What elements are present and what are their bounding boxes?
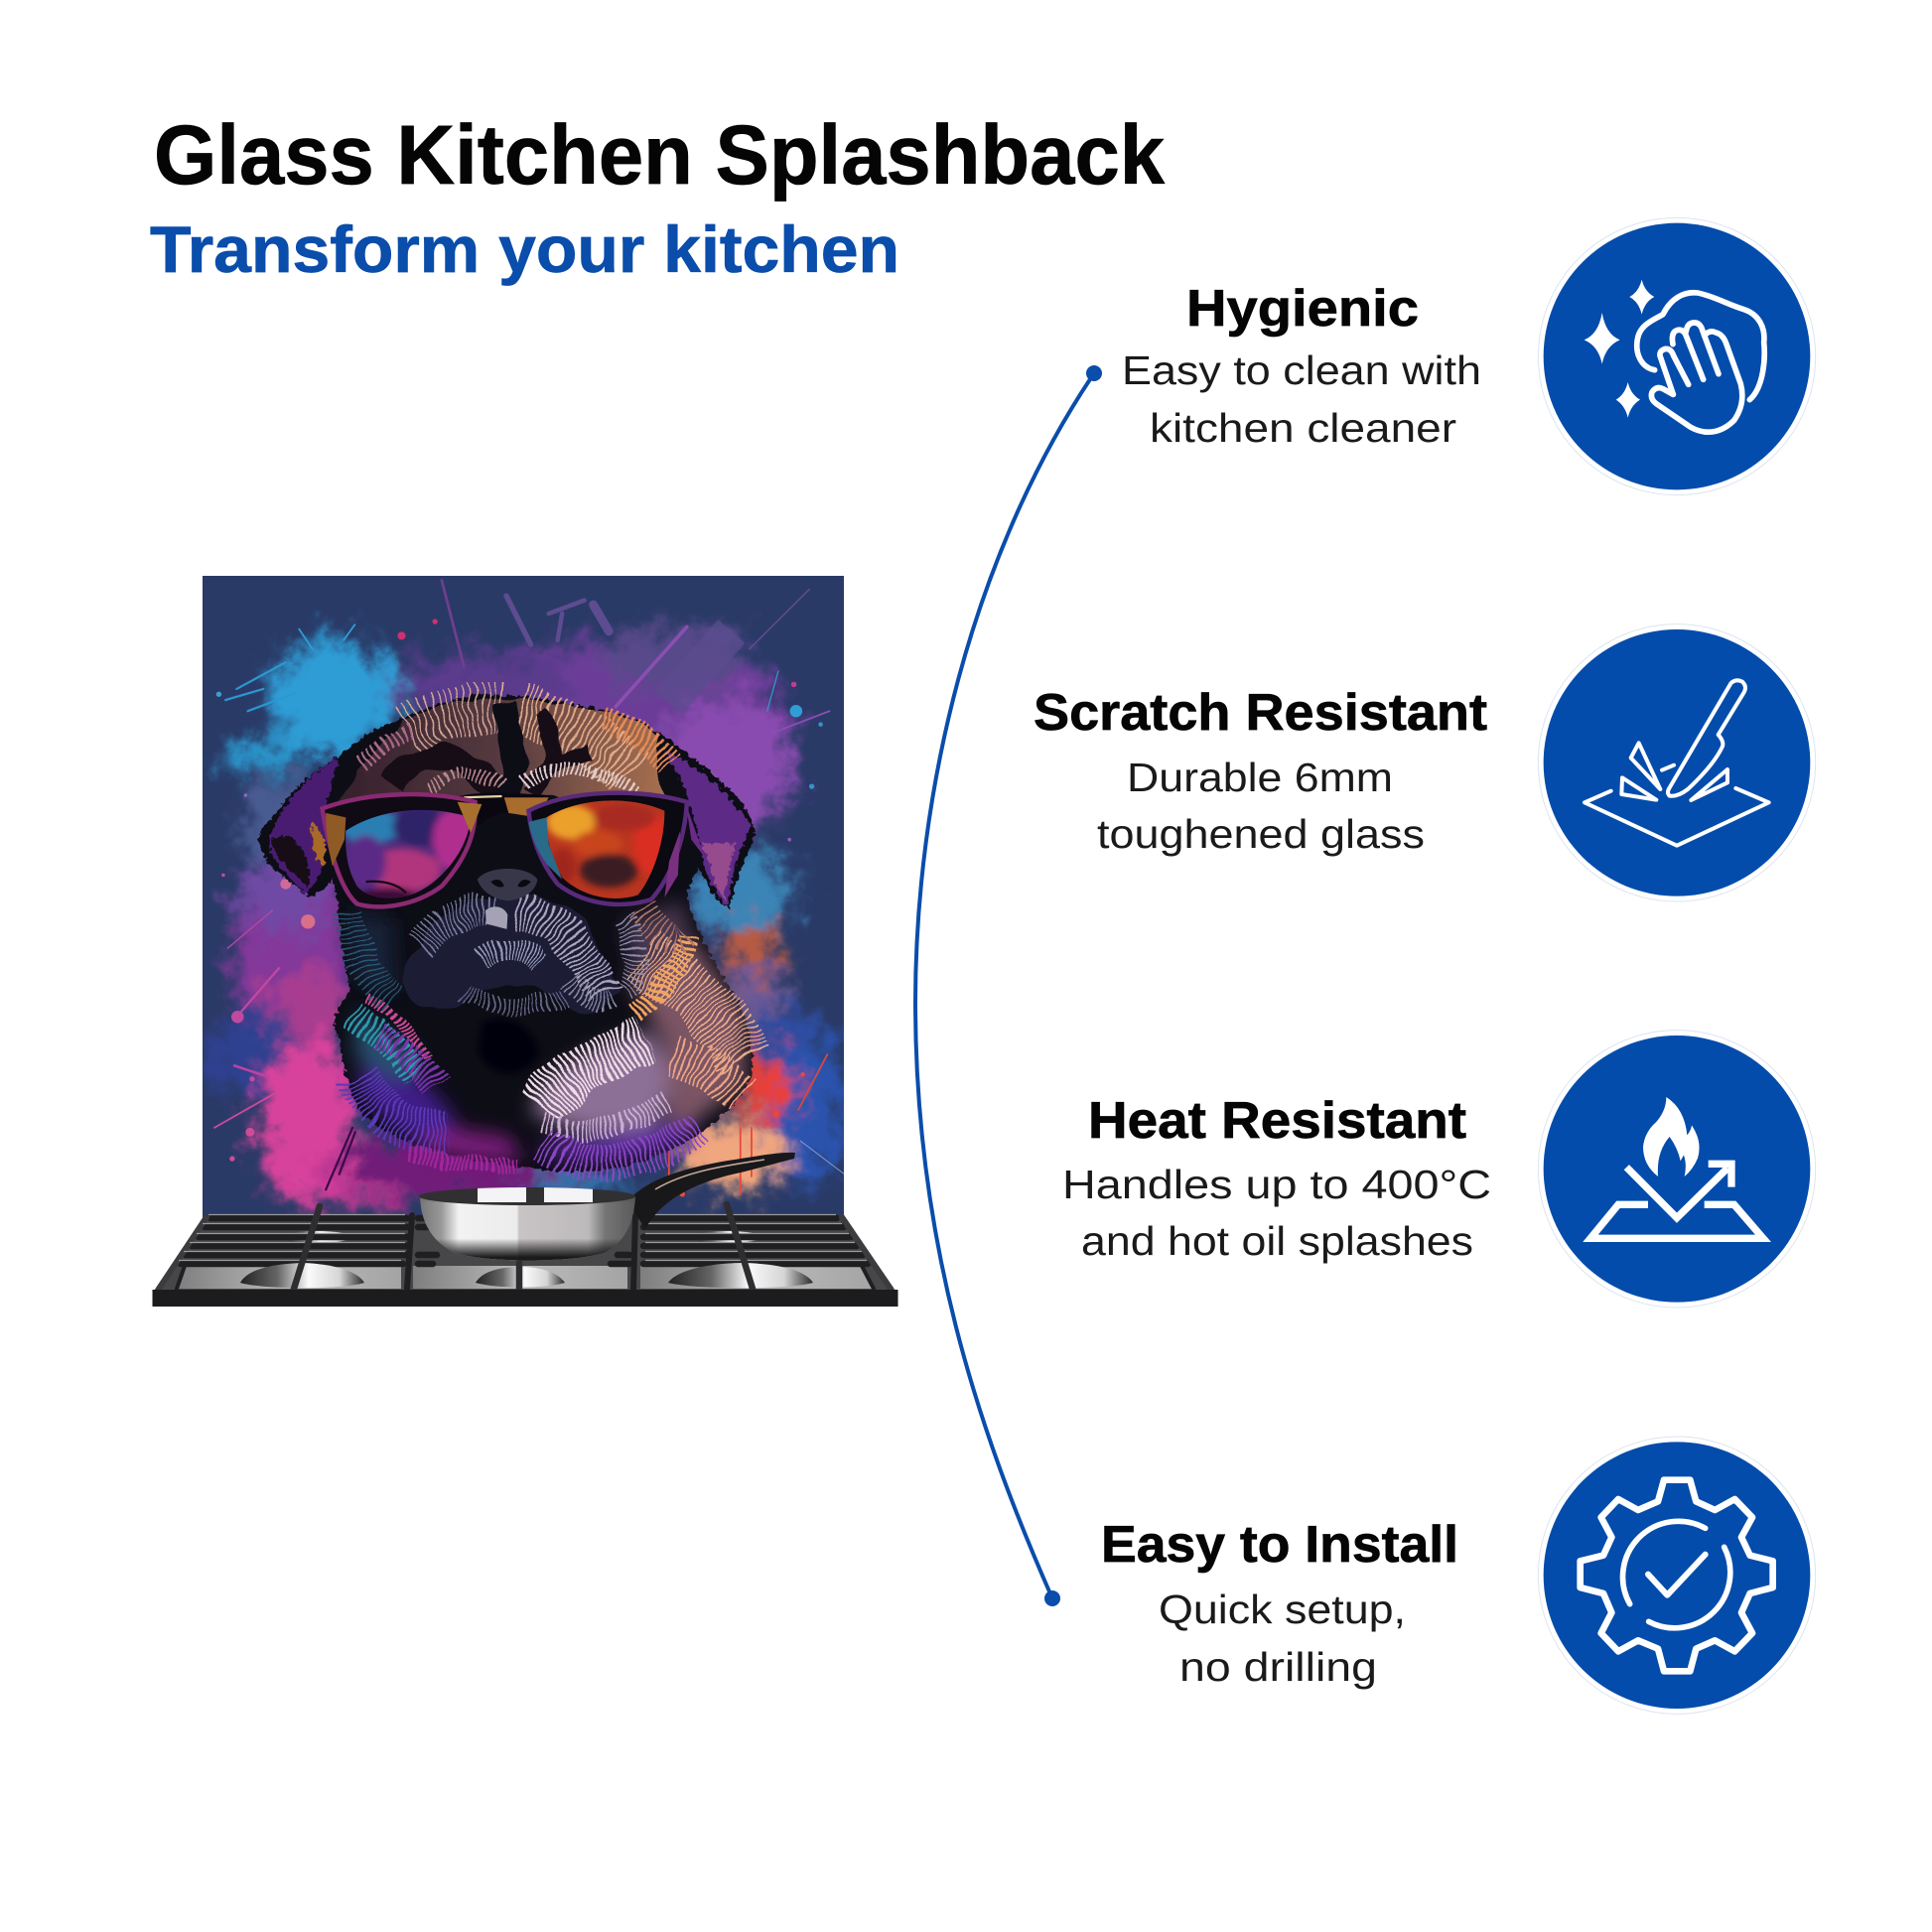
pug illustration bbox=[258, 694, 754, 1172]
feature: Scratch Resistant bbox=[1034, 684, 1487, 857]
description: Quick setup, bbox=[1159, 1587, 1406, 1632]
front burners bbox=[240, 1263, 813, 1288]
feature: Hygienic bbox=[1122, 280, 1481, 451]
icon: knife on glass bbox=[1538, 624, 1816, 901]
icon: cleaning hand bbox=[1538, 217, 1816, 495]
feature: Easy to Install bbox=[1101, 1516, 1458, 1690]
pan bbox=[419, 1153, 795, 1261]
connector curve bbox=[915, 365, 1102, 1606]
grate highlights bbox=[179, 1215, 867, 1261]
ears bbox=[268, 751, 752, 906]
heading: Hygienic bbox=[1186, 280, 1419, 338]
description: Handles up to 400°C bbox=[1062, 1162, 1491, 1207]
pan rim bbox=[419, 1187, 635, 1205]
icon: gear with check bbox=[1538, 1437, 1816, 1714]
description bbox=[1097, 755, 1425, 857]
forehead fur bbox=[335, 699, 669, 808]
colour zones of the coat bbox=[348, 901, 745, 1162]
feature: Heat Resistant bbox=[1062, 1092, 1491, 1264]
description: Durable 6mm bbox=[1127, 755, 1393, 800]
product illustration: splashback above gas hob bbox=[153, 576, 897, 1307]
right lens bbox=[528, 793, 705, 904]
description bbox=[1122, 347, 1481, 451]
description: toughened glass bbox=[1097, 811, 1425, 857]
nose bbox=[478, 869, 537, 900]
burner plates bbox=[177, 1266, 874, 1289]
nostrils bbox=[490, 880, 531, 887]
title: Glass Kitchen Splashback bbox=[154, 108, 1165, 202]
description: and hot oil splashes bbox=[1081, 1218, 1473, 1264]
grate bars bbox=[159, 1215, 891, 1289]
description bbox=[1062, 1162, 1491, 1264]
subtitle: Transform your kitchen bbox=[150, 212, 899, 286]
description: kitchen cleaner bbox=[1150, 405, 1456, 451]
heading: Scratch Resistant bbox=[1034, 684, 1487, 742]
muzzle bbox=[401, 896, 618, 1016]
description: Easy to clean with bbox=[1122, 347, 1481, 393]
hob front edge bbox=[153, 1290, 897, 1307]
heading: Heat Resistant bbox=[1088, 1092, 1466, 1150]
splashback panel artwork bbox=[203, 576, 848, 1221]
chin shadow bbox=[478, 1018, 540, 1074]
snout highlight bbox=[485, 906, 507, 929]
infographic canvas bbox=[150, 122, 1817, 1715]
sunglasses bbox=[323, 792, 705, 907]
rear burners bbox=[281, 1231, 762, 1243]
front grate fingers bbox=[294, 1204, 753, 1289]
pan handle bbox=[627, 1153, 795, 1229]
rim reflections bbox=[478, 1186, 593, 1202]
pan bowl bbox=[420, 1196, 635, 1261]
handle highlight bbox=[655, 1160, 764, 1189]
gas hob bbox=[153, 1153, 897, 1307]
paint splashes bbox=[206, 581, 848, 1207]
jowls and chest fur bbox=[348, 910, 747, 1166]
heading: Easy to Install bbox=[1101, 1516, 1458, 1574]
hob surface bbox=[154, 1216, 896, 1291]
left lens bbox=[323, 794, 482, 907]
description: no drilling bbox=[1179, 1644, 1377, 1690]
description bbox=[1159, 1587, 1406, 1690]
pug silhouette bbox=[258, 694, 754, 1172]
icon: flame on surface bbox=[1538, 1031, 1816, 1308]
